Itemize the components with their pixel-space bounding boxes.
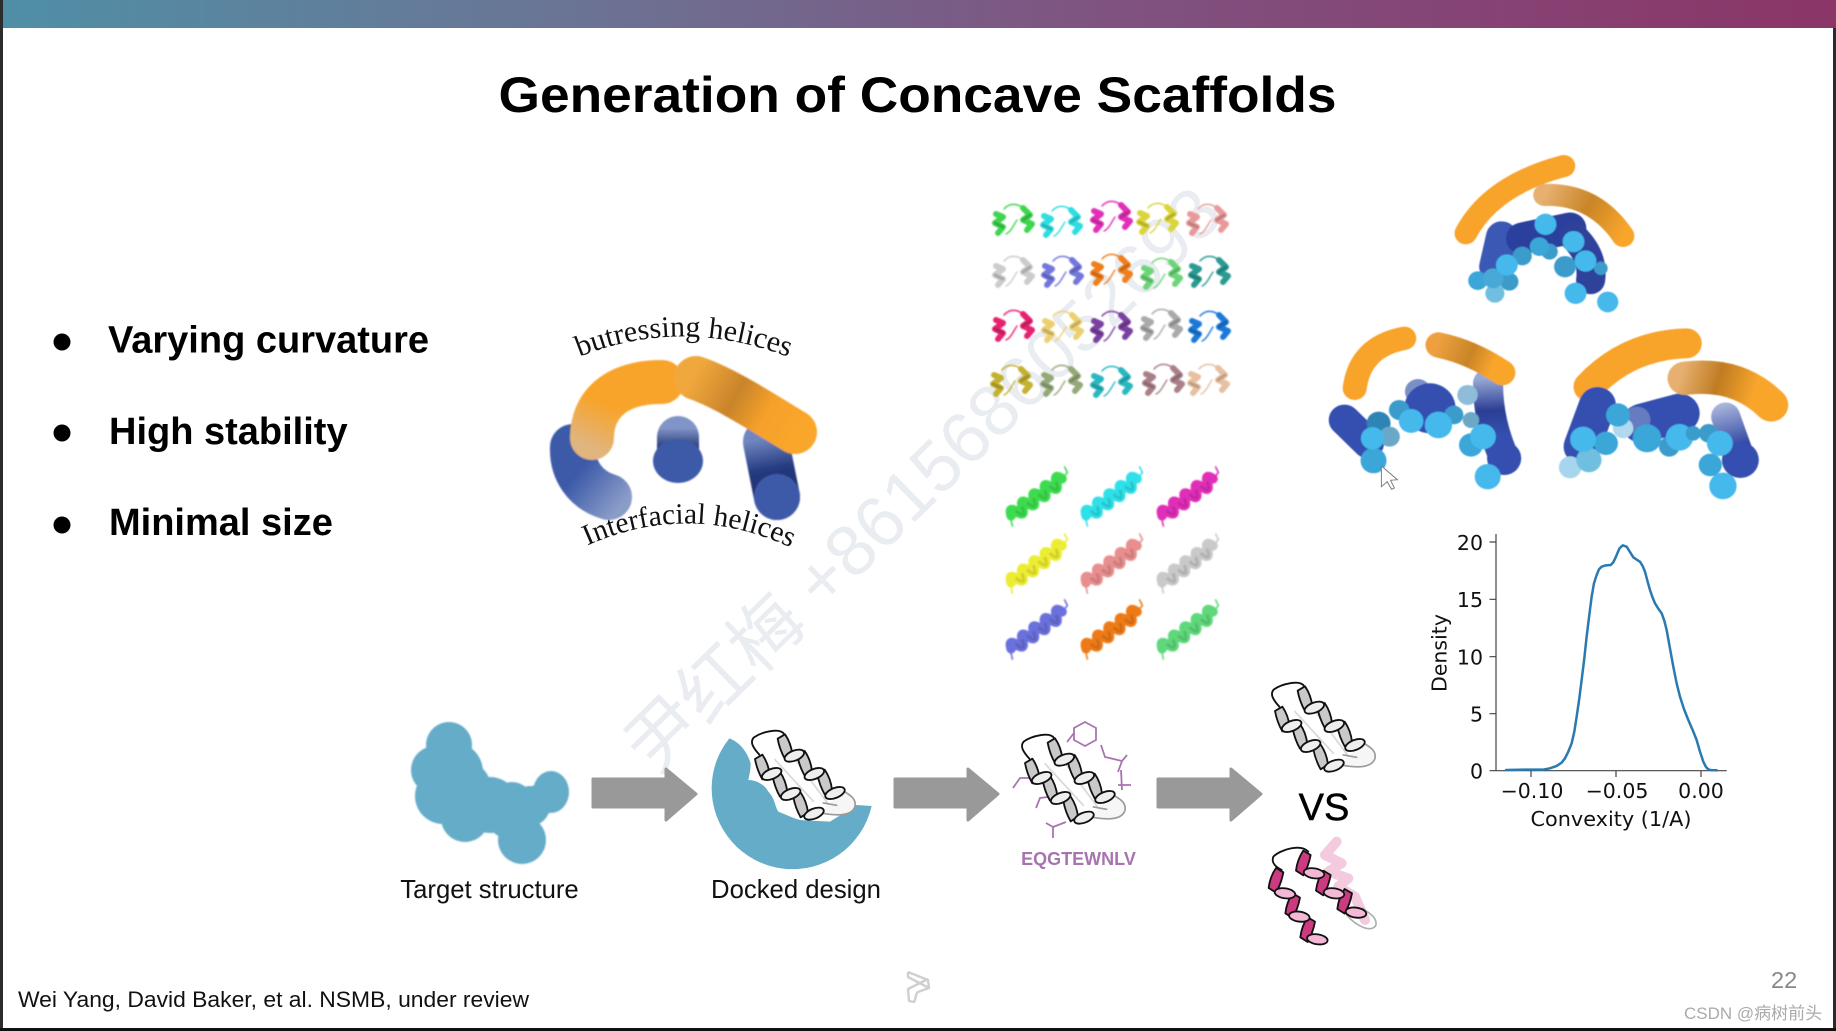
label: Docked design: [711, 876, 881, 904]
arrow 3: [1158, 769, 1261, 820]
helix row 1: [1002, 467, 1226, 526]
step: sequence design: [1013, 722, 1136, 869]
designed ribbon: [1022, 735, 1125, 826]
x tick labels: [1501, 779, 1724, 803]
window frame right edge: [1833, 28, 1836, 1031]
straight helix grid: [1002, 467, 1226, 659]
comparison: grey ribbon: [1272, 683, 1375, 774]
y tick labels: 20: [1457, 531, 1483, 555]
helix cylinders: [573, 378, 800, 520]
row 3: [995, 309, 1228, 341]
sequence label: EQGTEWNLV: [1021, 849, 1136, 869]
bullet: minimal size: Minimal size: [109, 502, 333, 544]
page number: 22: [1771, 967, 1797, 993]
curved label: interfacial helices: Interfacial helices: [580, 503, 794, 546]
density line chart: [1428, 531, 1727, 831]
helix row 2: [1002, 534, 1226, 593]
scaffold model: top: [1466, 166, 1623, 312]
y tick labels: [1457, 531, 1483, 784]
y tick labels: 5: [1470, 702, 1483, 726]
arrow 1: [593, 769, 696, 820]
x axis title: Convexity (1/A): [1530, 807, 1692, 831]
bullet list: [54, 320, 429, 544]
curved label: butressing helices: butressing helices: [572, 317, 791, 356]
scaffold model: bottom right: [1559, 343, 1771, 499]
label: Target structure: [400, 876, 579, 904]
purple side chains: [1013, 733, 1131, 838]
title: Generation of Concave Scaffolds: [498, 67, 1336, 123]
top gradient bar: [0, 0, 1836, 28]
pocket shape: [712, 738, 872, 869]
x tick labels: −0.10: [1501, 779, 1563, 803]
y tick labels: 0: [1470, 760, 1483, 784]
x tick labels: 0.00: [1678, 779, 1724, 803]
arrow 2: [895, 769, 998, 820]
row 2: [995, 254, 1228, 288]
helix row 3: [1002, 600, 1226, 659]
docked ribbon: [752, 731, 855, 822]
step: target structure: [400, 722, 579, 904]
y axis title: Density: [1428, 614, 1452, 692]
scaffold model: bottom left: [1344, 338, 1521, 489]
step: docked design: [711, 731, 881, 904]
window frame bottom edge: [0, 1028, 1836, 1031]
window frame left edge: [0, 0, 3, 1031]
axes: [1490, 534, 1727, 777]
y tick labels: 15: [1457, 588, 1483, 612]
icon: mouse cursor: [1381, 466, 1397, 489]
concave scaffold models: [1344, 166, 1771, 499]
small helix-loop-helix grid: [993, 201, 1228, 396]
hexagon ring: [1074, 722, 1096, 746]
target blob: [411, 722, 569, 864]
helix diagram: butressing and interfacial helices: [548, 317, 818, 546]
density curve: [1506, 545, 1717, 770]
icon: slide logo: [908, 972, 929, 1002]
watermark: 尹红梅 +8615686052693: [610, 172, 1237, 788]
VS label: VS: [1299, 787, 1349, 829]
row 1: [995, 201, 1226, 236]
CSDN watermark: CSDN @病树前头: [1684, 1004, 1822, 1023]
citation: Wei Yang, David Baker, et al. NSMB, under review: [18, 987, 530, 1012]
comparison: pink ribbon: [1269, 842, 1376, 952]
row 4: [993, 364, 1227, 396]
bullet: high stability: High stability: [109, 411, 348, 453]
x tick labels: −0.05: [1586, 779, 1648, 803]
y tick labels: 10: [1457, 646, 1483, 670]
bullet: varying curvature: Varying curvature: [108, 320, 429, 362]
